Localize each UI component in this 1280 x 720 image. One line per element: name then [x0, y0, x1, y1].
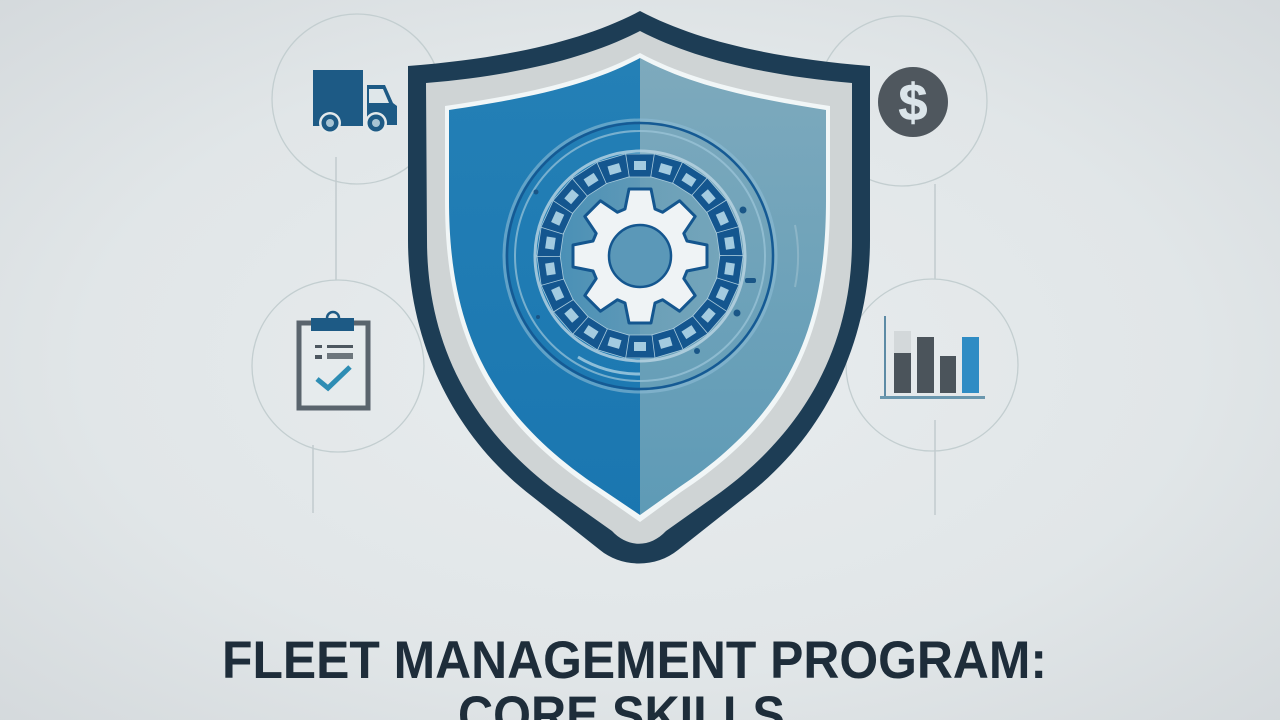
connector: truck to checklist — [335, 157, 337, 280]
ring dots — [534, 190, 756, 354]
icon: truck — [313, 70, 397, 134]
shield: outer dark border — [408, 11, 870, 564]
emblem: gear and rings — [504, 120, 798, 392]
title — [222, 631, 1047, 720]
circle: analytics — [846, 279, 1018, 451]
icon: clipboard — [299, 312, 368, 408]
shield: two-tone face — [449, 58, 826, 515]
icon: dollar coin: $ — [899, 74, 928, 132]
circle: cost control — [817, 16, 987, 186]
shield: grey bevel — [426, 31, 852, 544]
icon: gear — [573, 189, 707, 323]
connector: chart down — [934, 420, 936, 515]
connector: dollar to chart — [934, 184, 936, 279]
title line 1: FLEET MANAGEMENT PROGRAM: — [222, 631, 1047, 690]
icon: bar chart — [880, 316, 985, 399]
shield: white inner edge — [445, 53, 830, 522]
icon: dollar coin — [878, 67, 948, 137]
circle: fleet vehicles — [272, 14, 442, 184]
inner disc — [560, 176, 720, 336]
shield — [408, 11, 870, 564]
circle: compliance checklist — [252, 280, 424, 452]
segmented ring — [537, 154, 743, 358]
outer rings — [504, 120, 798, 392]
connector: checklist down — [312, 445, 314, 513]
